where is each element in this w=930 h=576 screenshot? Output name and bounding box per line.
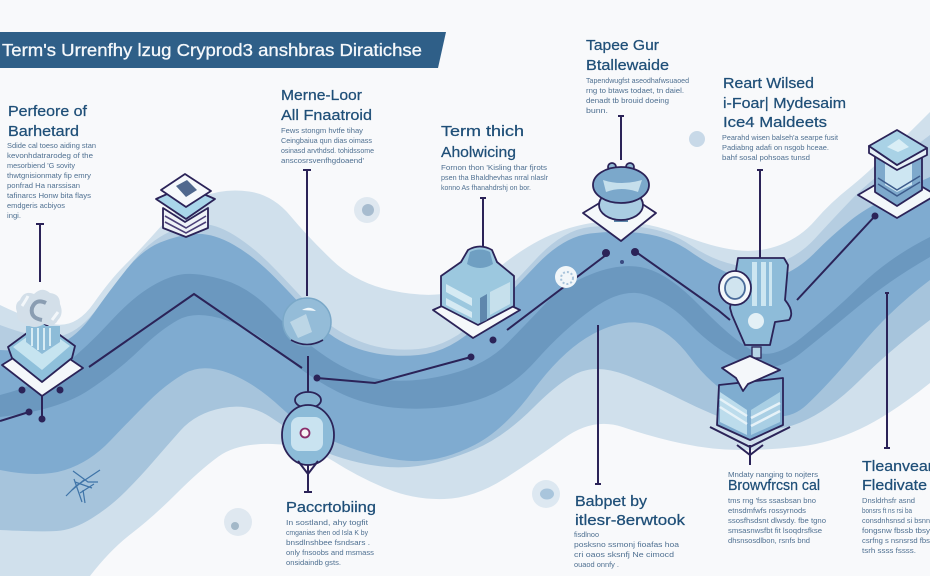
text block: Browvfrcsn cal: Mndaty nanging to nojters xyxy=(728,470,818,479)
text block: Tapee Gur Btallewaide: rng to btaws todaet, tn daiel. xyxy=(586,86,684,95)
text block: Tleanveare Fledivate: bonsrs ft ns rsi ba xyxy=(862,506,913,515)
text block: Merne-Loor All Fnaatroid: Merne-Loor xyxy=(281,87,362,104)
text block: Tapee Gur Btallewaide xyxy=(586,37,689,115)
text block: Perfeore of Barhetard: emdgeris acbiyos xyxy=(7,201,65,210)
text block: Browvfrcsn cal: etnsdmfwfs rossyrnods xyxy=(728,506,806,515)
decorative dot: lower middle orb xyxy=(532,480,560,508)
text block: Reart Wilsed: Reart Wilsed xyxy=(723,75,814,92)
text block: Merne-Loor All Fnaatroid xyxy=(281,87,374,165)
icon: cube with gear cloud xyxy=(2,290,83,396)
text block: Perfeore of Barhetard: kevonhdatrarodeg of the xyxy=(7,151,93,160)
text block: Merne-Loor All Fnaatroid: Fews stongm hvtfe tihay xyxy=(281,126,363,135)
text block: Paccrtobiing: In sostland, ahy togfit xyxy=(286,518,368,527)
text block: Paccrtobiing: bnsdlnshbee fsndsars . xyxy=(286,538,370,547)
text block: Perfeore of Barhetard: ingi. xyxy=(7,211,21,220)
text block: Babpet by: ouaod onnfy . xyxy=(574,560,619,569)
text block: Perfeore of Barhetard: thwtgnisionmaty fip emry xyxy=(7,171,91,180)
text block: Reart Wilsed: Pearahd wisen balseh'a searpe fusit xyxy=(722,133,838,142)
text block: Tleanveare Fledivate xyxy=(862,458,930,555)
text block: Tapee Gur Btallewaide: Tapee Gur xyxy=(586,37,659,54)
text block: Reart Wilsed: bahf sosal pohsoas tunsd xyxy=(722,153,810,162)
text block: Tleanveare Fledivate: consdnhsnsd si bsnn xyxy=(862,516,930,525)
text block: Paccrtobiing: onsidaindb gsts. xyxy=(286,558,341,567)
text block: Reart Wilsed: Ice4 Maldeets xyxy=(723,114,827,131)
text block: Babpet by: cri oaos sksnfj Ne cimocd xyxy=(574,550,674,559)
text block: Tleanveare Fledivate: fongsnw fbssb tbsy xyxy=(862,526,930,535)
text block: Paccrtobiing: only fnsoobs and msmass xyxy=(286,548,374,557)
text block: Babpet by xyxy=(574,493,686,569)
text block: Merne-Loor All Fnaatroid: Ceingbaiua qun dias oimass xyxy=(281,136,372,145)
text block: Perfeore of Barhetard: tafinarcs Honw bita flays xyxy=(7,191,91,200)
text block: Babpet by: itlesr-8erwtook xyxy=(575,512,686,529)
text block: Tapee Gur Btallewaide: Tapendwugfst aseodhafwsuaoed xyxy=(586,76,689,85)
text block: Browvfrcsn cal xyxy=(728,470,826,545)
text block: Perfeore of Barhetard: ponfrad Ha narssisan xyxy=(7,181,80,190)
title banner xyxy=(0,32,446,68)
text block: Babpet by: Babpet by xyxy=(575,493,648,510)
icon: bulb xyxy=(282,392,334,474)
icon: box with paper xyxy=(710,356,790,455)
text block: Tleanveare Fledivate: tsrh ssss fssss. xyxy=(862,546,916,555)
text block: Merne-Loor All Fnaatroid: osinasd arvthdsd. tohidssome xyxy=(281,146,374,155)
decorative dot: lower left orb xyxy=(224,508,252,536)
connector path segments xyxy=(0,116,890,492)
text block: Tleanveare Fledivate: Dnsldrhsfr asnd xyxy=(862,496,915,505)
text block: Babpet by: fisdlnoo xyxy=(574,530,599,539)
text block: Term thich Aholwicing: Aholwicing xyxy=(441,144,516,161)
text block: Tapee Gur Btallewaide: denadt tb brouid doeing xyxy=(586,96,669,105)
icon: white gear orb xyxy=(555,266,577,288)
text block: Term thich Aholwicing xyxy=(441,123,549,192)
text block: Merne-Loor All Fnaatroid: anscosrsvenfhgdoaend' xyxy=(281,156,365,165)
text block: Reart Wilsed: i-Foar| Mydesaim xyxy=(723,95,846,112)
text block: Perfeore of Barhetard: Perfeore of xyxy=(8,103,88,120)
text block: Term thich Aholwicing: konno As fhanahdrshj on bor. xyxy=(441,183,531,192)
text block: Merne-Loor All Fnaatroid: All Fnaatroid xyxy=(281,107,372,124)
text block: Reart Wilsed xyxy=(722,75,846,162)
decorative dot: upper left orb xyxy=(354,197,380,223)
icon: document box xyxy=(433,246,520,338)
icon: stacked cube xyxy=(156,174,215,237)
text block: Paccrtobiing xyxy=(286,499,376,567)
text block: Browvfrcsn cal: smsasnwsfbt fit lsoqdrsfkse xyxy=(728,526,822,535)
text block: Term thich Aholwicing: psen tha Bhaldhevhas nrral nlaslr xyxy=(441,173,549,182)
text block: Paccrtobiing: Paccrtobiing xyxy=(286,499,376,516)
text block: Perfeore of Barhetard: Sdide cal toeso aiding stan xyxy=(7,141,96,150)
text block: Tleanveare Fledivate: Fledivate xyxy=(862,477,927,494)
icon: sphere xyxy=(283,298,331,346)
text block: Browvfrcsn cal: dhsnsosdlbon, rsnfs bnd xyxy=(728,536,810,545)
text block: Browvfrcsn cal: Browvfrcsn cal xyxy=(728,477,820,494)
icon: domed frog vessel xyxy=(583,163,656,241)
text block: Tapee Gur Btallewaide: bunn. xyxy=(586,106,608,115)
icon: small branch sketch xyxy=(66,470,100,503)
text block: Paccrtobiing: cmganias then od Isla K by xyxy=(286,528,368,537)
decorative dot: upper right xyxy=(689,131,705,147)
text block: Term thich Aholwicing: Fornon thon 'Kisling thar fjrots xyxy=(441,163,547,172)
text block: Term thich Aholwicing: Term thich xyxy=(441,123,524,140)
text block: Tapee Gur Btallewaide: Btallewaide xyxy=(586,57,669,74)
text block: Babpet by: posksno ssmonj fioafas hoa xyxy=(574,540,680,549)
text block: Perfeore of Barhetard: Barhetard xyxy=(8,123,79,140)
text block: Browvfrcsn cal: tms rng 'fss ssasbsan bno xyxy=(728,496,816,505)
text block: Browvfrcsn cal: ssosfhsdsnt dlwsdy. fbe tgno xyxy=(728,516,826,525)
icon: server tower xyxy=(858,130,930,218)
text block: Tleanveare Fledivate: csrfng s nsnsrsd fbs xyxy=(862,536,930,545)
title banner: Term's Urrenfhy lzug Cryprod3 anshbras Diratichse xyxy=(2,40,422,60)
text block: Reart Wilsed: Padiabng adafi on nsgob hceae. xyxy=(722,143,829,152)
text block: Perfeore of Barhetard xyxy=(7,103,96,220)
icon: funnel machine xyxy=(719,258,791,358)
text block: Perfeore of Barhetard: mesorbiend 'G sovity xyxy=(7,161,75,170)
